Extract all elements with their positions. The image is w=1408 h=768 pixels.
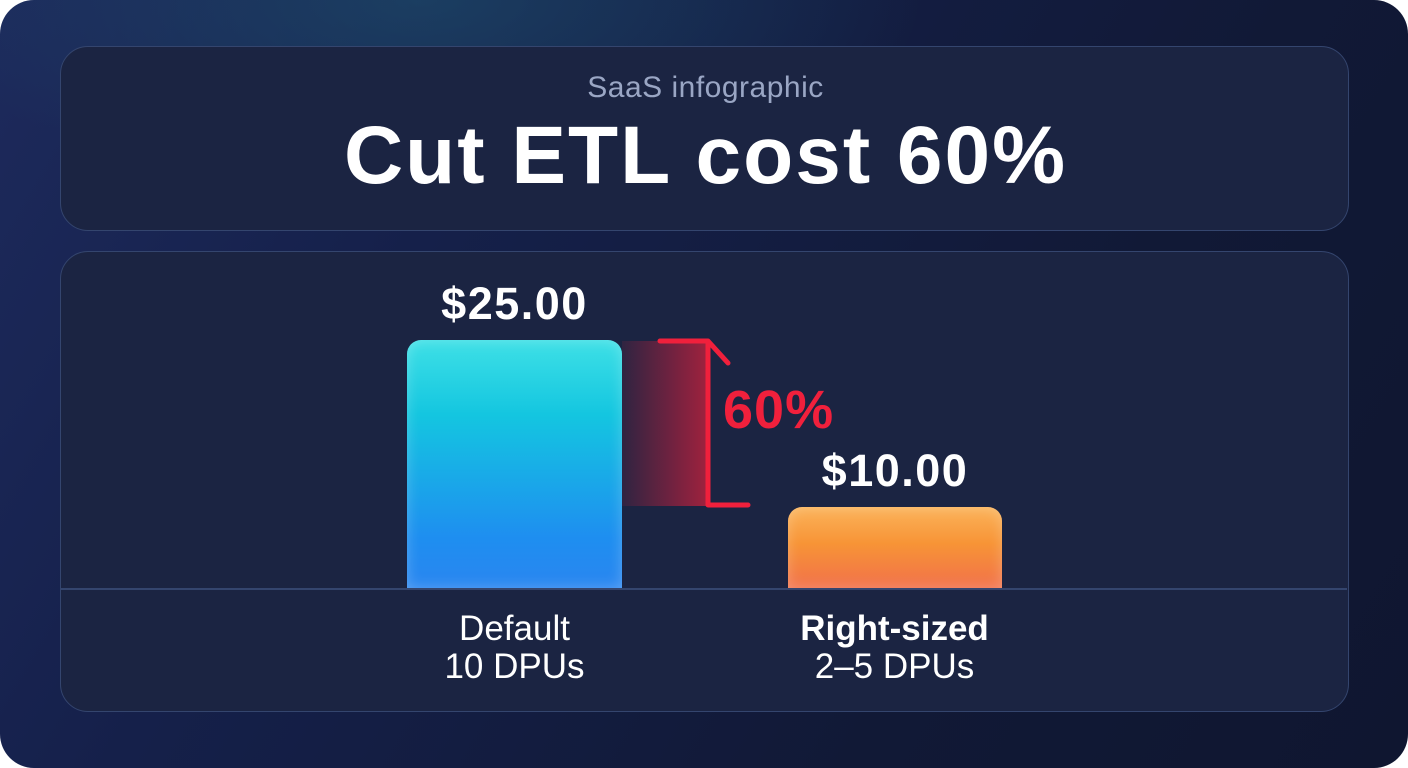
subtitle: SaaS infographic	[587, 71, 824, 104]
title: Cut ETL cost 60%	[344, 110, 1067, 201]
panel: header	[60, 46, 1349, 231]
value: $25.00: $25.00	[441, 278, 588, 329]
panel: chart	[60, 251, 1349, 712]
label: 60%: 60%	[723, 380, 834, 440]
bar: default	[407, 340, 622, 588]
label: right-sized	[800, 609, 989, 686]
label: default: Default	[459, 609, 570, 648]
reduction bracket	[622, 338, 834, 508]
label: default: 10 DPUs	[444, 647, 585, 686]
label: right-sized: 2–5 DPUs	[815, 647, 974, 686]
value: $10.00: $10.00	[822, 445, 968, 496]
baseline	[61, 588, 1347, 590]
label: default	[444, 609, 585, 686]
bar: right-sized	[788, 507, 1002, 588]
label: right-sized: Right-sized	[800, 609, 989, 648]
